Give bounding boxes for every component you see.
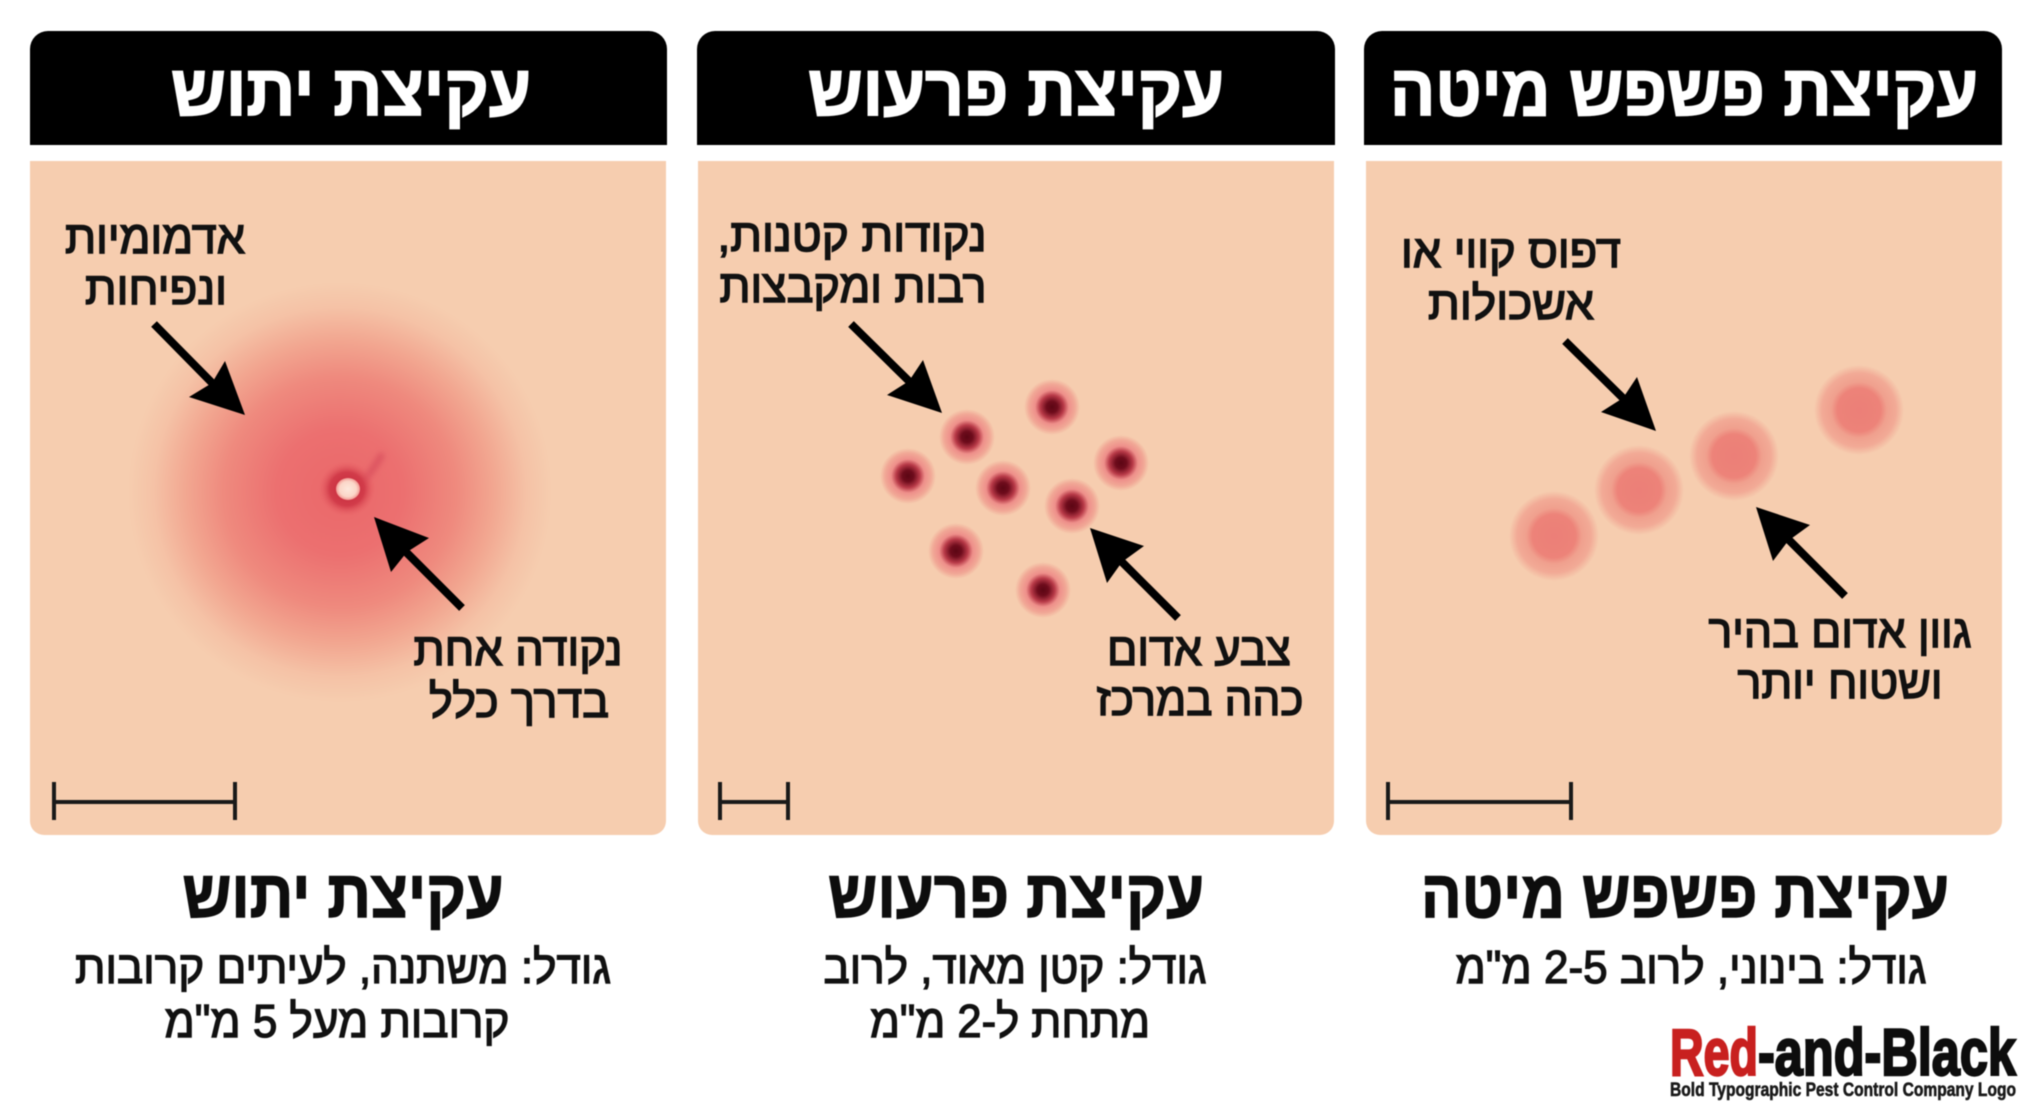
caption: tick bite [75,857,611,1047]
bite line [1509,365,1904,581]
arrow: to bright bite [1756,507,1845,596]
logo: Red [1670,1015,1758,1089]
caption: bed bug bite [1421,857,1949,993]
callout: many small clustered dots [718,209,986,312]
callout: brighter and flatter: גוון אדום בהיר [1708,605,1972,657]
caption: tick bite: עקיצת יתוש [182,857,504,932]
arrow: to puncture [374,517,462,608]
scale bar [1388,782,1571,820]
caption: flea bite: עקיצת פרעוש [828,857,1204,932]
caption: tick bite: גודל: משתנה, לעיתים קרובות [75,941,611,993]
callout: redness and swelling: ונפיחות [85,262,227,314]
header: flea bite [697,31,1335,145]
caption: flea bite: גודל: קטן מאוד, לרוב [824,941,1206,993]
panel: flea bite [697,31,1335,1047]
callout: dark red center [1096,623,1304,725]
panel: bed bug bite [1364,31,2002,993]
bite puncture [318,456,381,517]
caption: bed bug bite: גודל: בינוני, לרוב 2-5 מ"מ [1456,941,1926,993]
callout: usually one point [414,623,622,727]
callout: many small clustered dots: רבות ומקבצות [720,260,986,312]
arrow: to bite line [1565,341,1656,431]
redness area [128,282,552,702]
callout: line or cluster pattern: דפוס קווי או [1401,225,1621,277]
caption: bed bug bite: עקיצת פשפש מיטה [1421,857,1949,932]
callout: redness and swelling: אדמומיות [65,211,245,263]
callout: brighter and flatter [1708,605,1972,708]
logo [1670,1015,2016,1101]
callout: usually one point: בדרך כלל [429,675,609,727]
skin illustration: tick bite [30,161,666,835]
caption: flea bite [824,857,1206,1047]
callout: redness and swelling [65,211,245,314]
header: bed bug bite [1364,31,2002,145]
skin illustration: bed bug bite [1366,161,2002,835]
callout: brighter and flatter: ושטוח יותר [1738,656,1942,708]
header: tick bite [30,31,667,145]
header: bed bug bite: עקיצת פשפש מיטה [1390,51,1978,131]
callout: line or cluster pattern [1401,225,1621,329]
callout: dark red center: צבע אדום [1107,623,1291,675]
arrow: to dark center [1090,528,1178,618]
callout: line or cluster pattern: אשכולות [1428,277,1594,329]
skin illustration: flea bite [698,161,1334,835]
caption: flea bite: מתחת ל-2 מ"מ [870,995,1150,1047]
callout: usually one point: נקודה אחת [414,623,622,675]
arrow: to redness [154,324,245,415]
arrow: to cluster [851,324,942,413]
callout: many small clustered dots: נקודות קטנות, [718,209,986,261]
panel: tick bite [30,31,667,1047]
callout: dark red center: כהה במרכז [1096,673,1304,725]
header: flea bite: עקיצת פרעוש [808,51,1224,131]
scale bar [720,782,788,820]
scale bar [54,782,235,820]
bite cluster [880,379,1149,618]
header: tick bite: עקיצת יתוש [171,51,531,131]
caption: tick bite: קרובות מעל 5 מ"מ [165,995,510,1047]
